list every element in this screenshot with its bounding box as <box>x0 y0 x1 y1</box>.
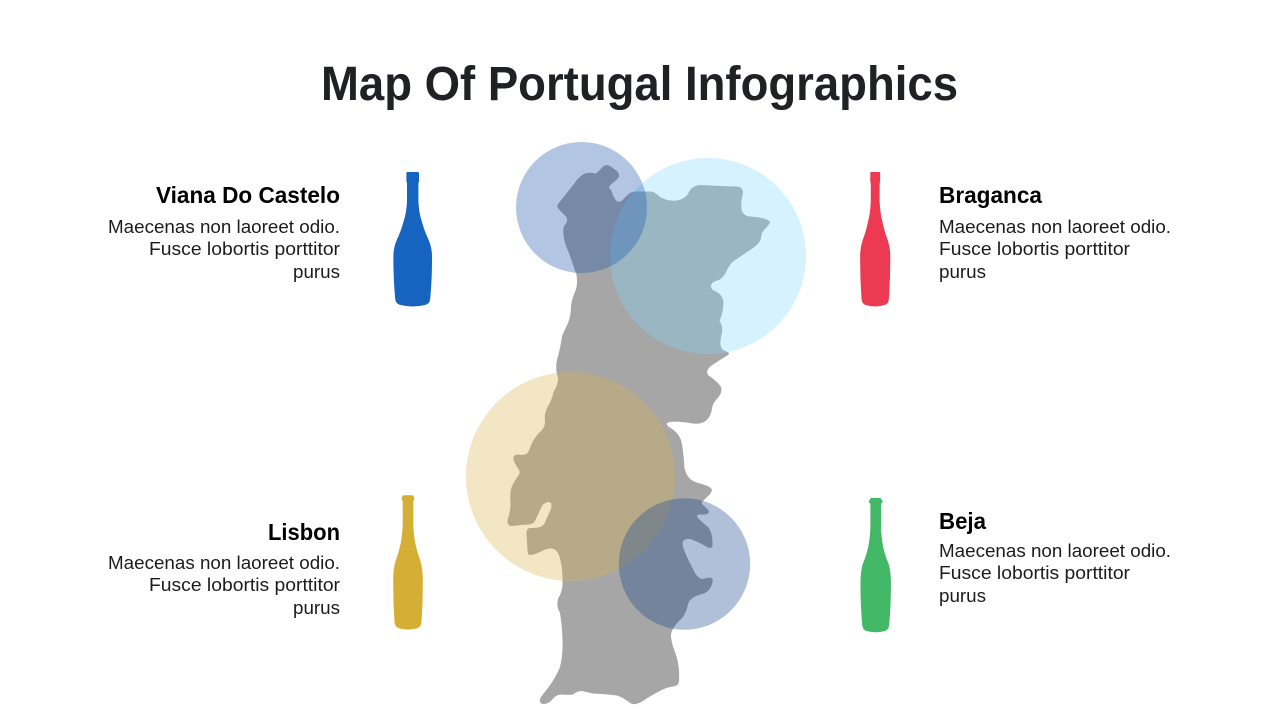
text block: Viana Do Castelo <box>108 182 340 282</box>
text block: Beja <box>939 508 1171 606</box>
text block: Braganca <box>939 182 1171 282</box>
icon: yellow bottle <box>393 495 423 630</box>
text block: Braganca: purus <box>939 262 986 282</box>
icon: red bottle <box>860 172 890 306</box>
text block: Viana Do Castelo: Fusce lobortis porttitor <box>149 239 340 259</box>
text block: Viana Do Castelo: Maecenas non laoreet odio. <box>108 217 340 237</box>
text block: Viana Do Castelo: Viana Do Castelo <box>156 182 340 208</box>
text block: Viana Do Castelo: purus <box>293 262 340 282</box>
circle: Braganca region <box>610 158 806 354</box>
icon: blue bottle <box>393 172 432 306</box>
text block: Beja: Fusce lobortis porttitor <box>939 563 1130 583</box>
text block: Lisbon: Fusce lobortis porttitor <box>149 575 340 595</box>
text block: Beja: Maecenas non laoreet odio. <box>939 541 1171 561</box>
text block: Lisbon: purus <box>293 598 340 618</box>
circle: Lisbon region <box>466 372 675 581</box>
text block: Braganca: Braganca <box>939 182 1042 208</box>
title: Map Of Portugal Infographics <box>321 58 958 111</box>
icon: green bottle <box>860 498 891 632</box>
circle: Beja region <box>619 498 750 630</box>
map of Portugal <box>507 165 770 704</box>
text block: Braganca: Fusce lobortis porttitor <box>939 239 1130 259</box>
text block: Braganca: Maecenas non laoreet odio. <box>939 217 1171 237</box>
text block: Lisbon: Lisbon <box>268 519 340 545</box>
circle: Viana Do Castelo region <box>516 142 647 273</box>
text block: Beja: Beja <box>939 508 986 534</box>
text block: Beja: purus <box>939 586 986 606</box>
text block: Lisbon <box>108 519 340 618</box>
text block: Lisbon: Maecenas non laoreet odio. <box>108 553 340 573</box>
